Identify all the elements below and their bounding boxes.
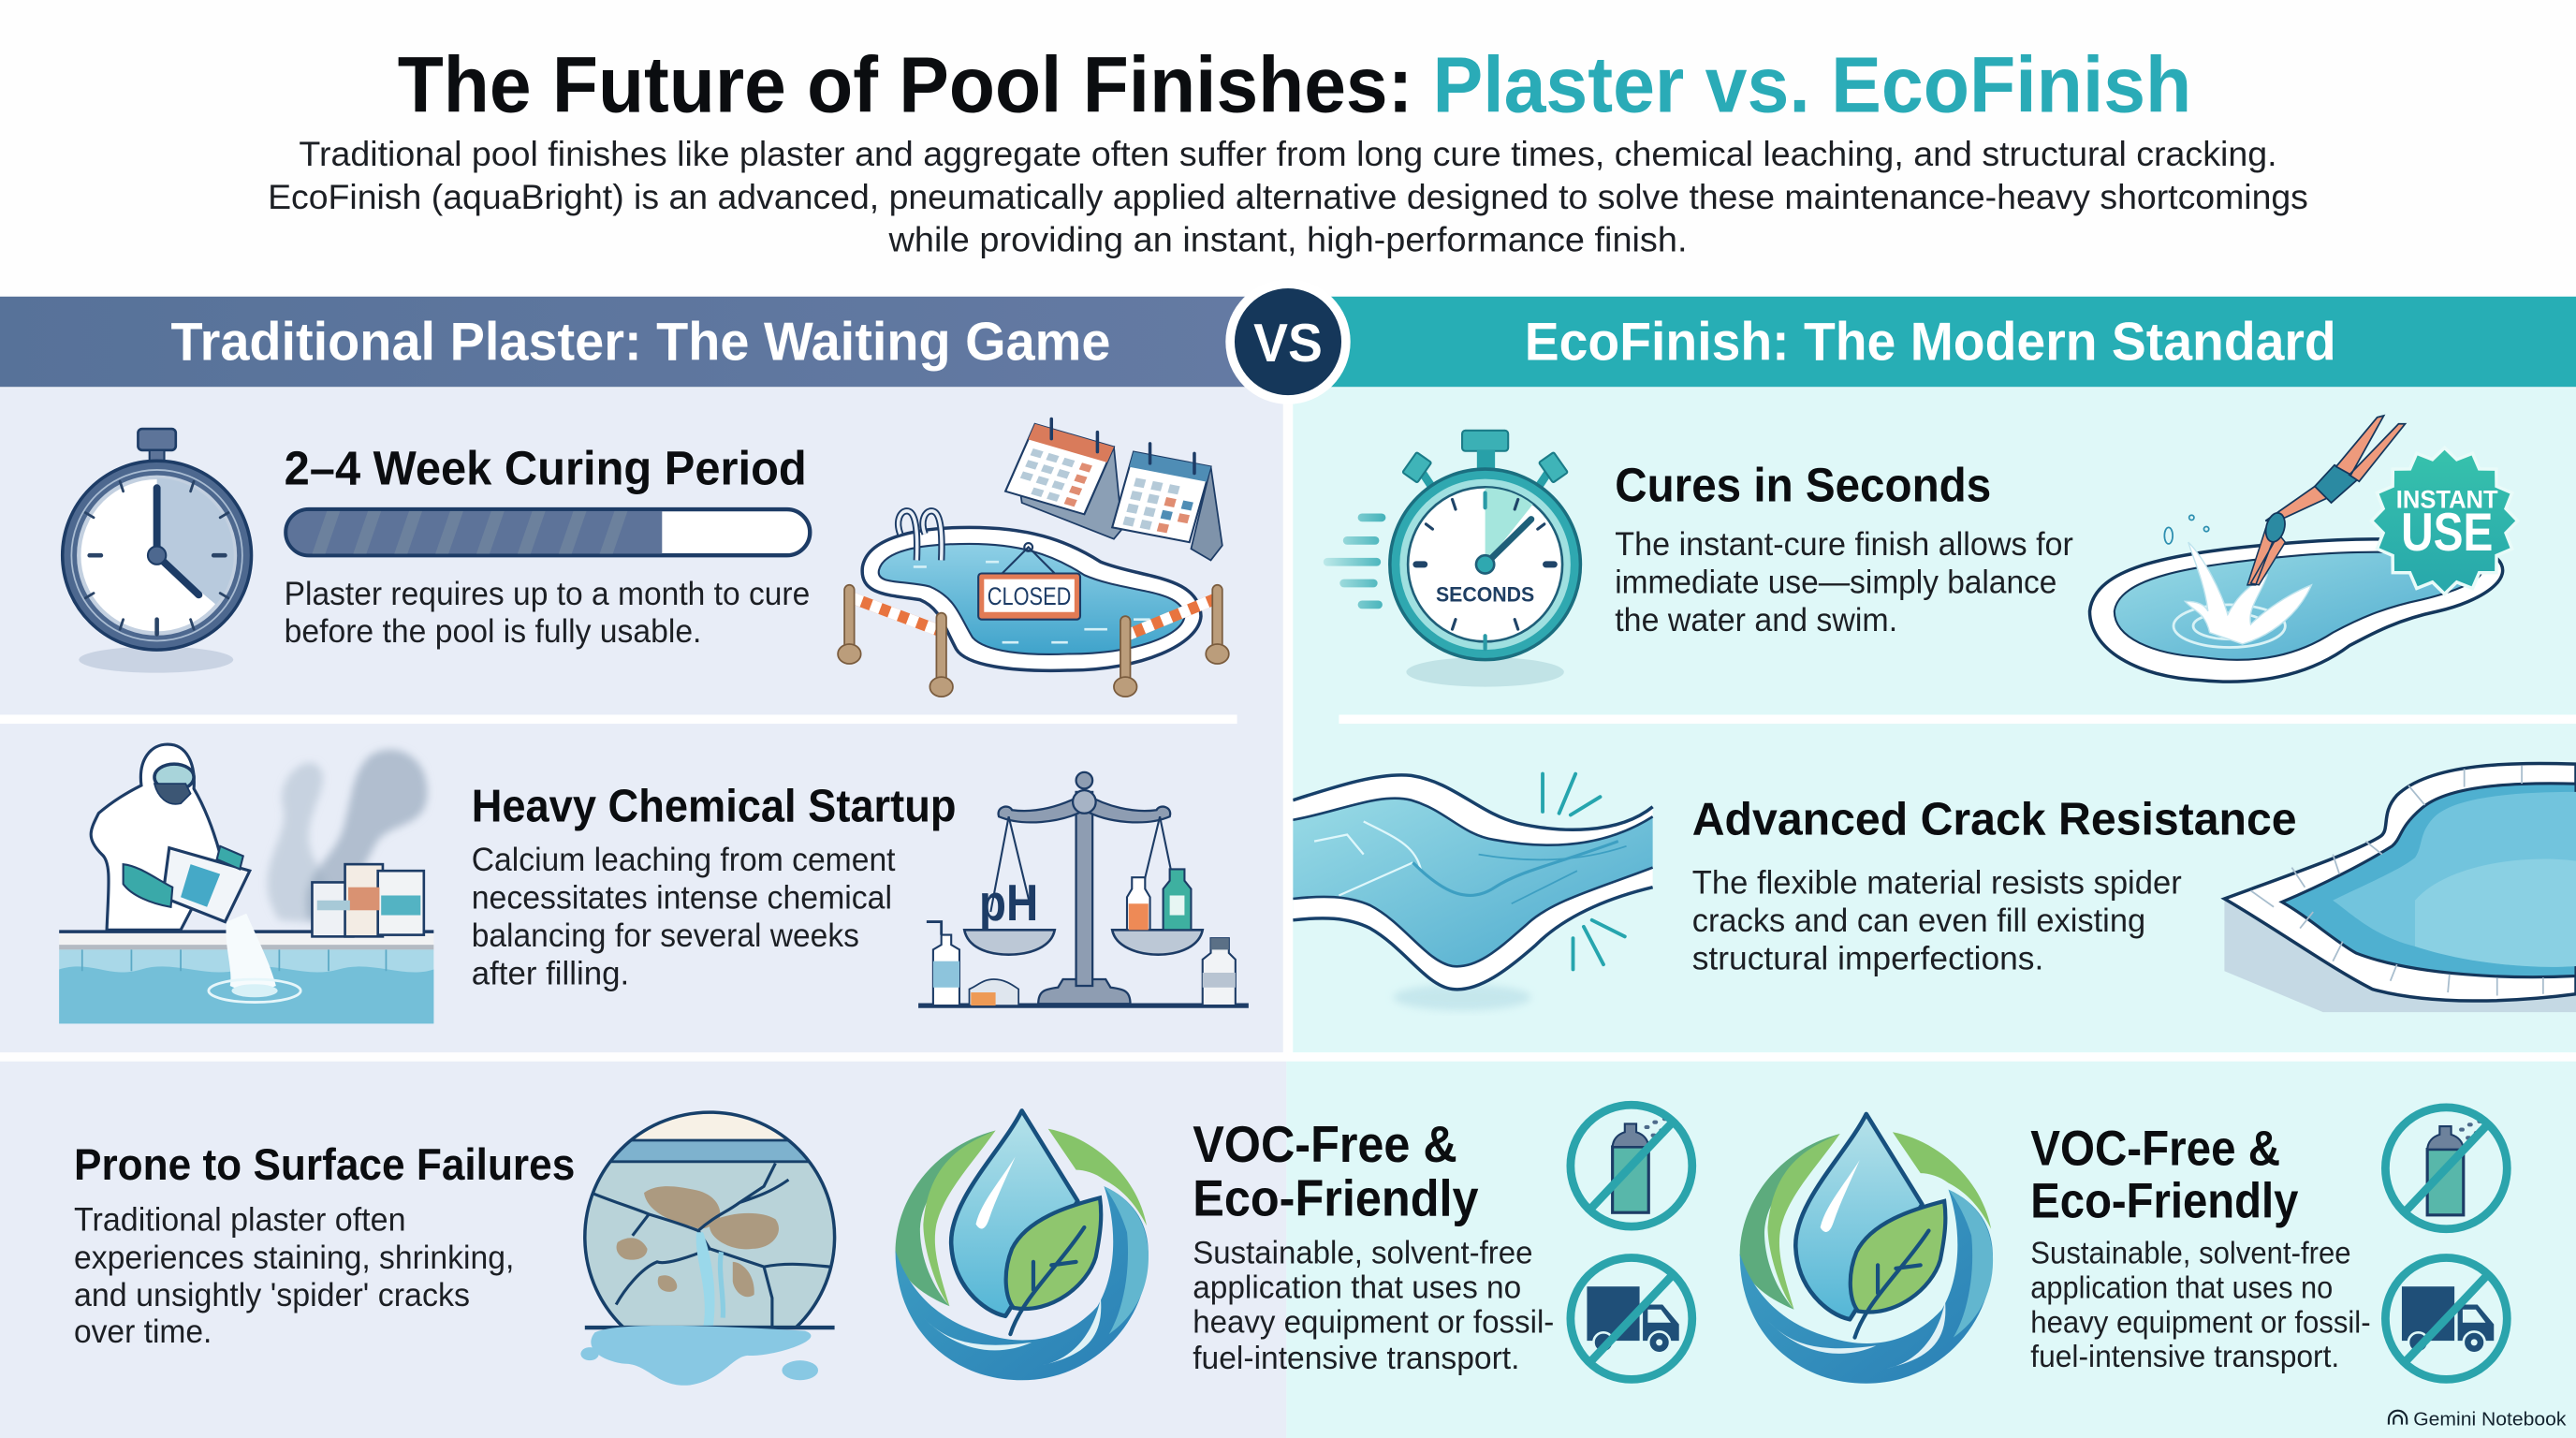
text block: surface failures: experiences staining, shrinking, (74, 1240, 514, 1276)
header: ecofinish (1327, 297, 2576, 387)
text block: voc-free right: Eco-Friendly (2030, 1173, 2298, 1228)
intro paragraph: EcoFinish (aquaBright) is an advanced, pneumatically applied alternative designed to solve these maintenance-heavy shortcomings (268, 178, 2308, 216)
text block: voc-free right: VOC-Free & (2030, 1121, 2280, 1176)
illustration: flexing finish wave (1293, 774, 1653, 1010)
text: crack description: cracks and can even fill existing (1692, 902, 2145, 939)
header: ecofinish: EcoFinish: The Modern Standard (1525, 312, 2336, 372)
title: The Future of Pool Finishes: (398, 40, 1412, 128)
text block: voc-free left: fuel-intensive transport. (1193, 1341, 1519, 1376)
heading: crack resistance: Advanced Crack Resistance (1692, 795, 2297, 845)
text block: voc-free left: VOC-Free & (1193, 1116, 1457, 1173)
panel: traditional plaster background (0, 388, 1286, 1438)
text: chemical description: necessitates intense chemical (472, 880, 892, 917)
text block: voc-free left: Sustainable, solvent-free (1193, 1236, 1533, 1271)
text: cures description: immediate use—simply balance (1615, 565, 2056, 601)
header: traditional plaster: Traditional Plaster: The Waiting Game (171, 312, 1110, 372)
intro paragraph: while providing an instant, high-performance finish. (887, 221, 1687, 259)
instant use badge: USE (2401, 503, 2493, 563)
illustration: cracked plaster (575, 1101, 846, 1386)
text block: voc-free right: Sustainable, solvent-free (2030, 1237, 2351, 1271)
text block: voc-free left: Eco-Friendly (1193, 1170, 1479, 1227)
icon: no heavy transport (1571, 1257, 1692, 1379)
text: cures description: The instant-cure finish allows for (1615, 526, 2073, 563)
text: cures description (1615, 526, 2073, 638)
illustration: swimmer diving into pool (2089, 416, 2518, 682)
icon: calendars (1005, 419, 1222, 560)
illustration: pool corner (2224, 764, 2576, 1012)
title: Plaster vs. EcoFinish (1432, 40, 2191, 128)
vs badge: VS (1253, 314, 1323, 374)
illustration: worker pouring chemicals (59, 744, 433, 1023)
icon: plaster stopwatch (63, 429, 252, 673)
intro paragraph (268, 135, 2308, 259)
vs badge (1225, 279, 1351, 404)
instant use badge (2371, 448, 2518, 594)
illustration: ph balance scale (918, 772, 1249, 1005)
intro paragraph: Traditional pool finishes like plaster and aggregate often suffer from long cure times, chemical leaching, and structural cracking. (299, 135, 2277, 173)
text: chemical description (472, 842, 896, 991)
icon: no heavy transport right (2385, 1257, 2507, 1379)
text block: surface failures: over time. (74, 1313, 212, 1350)
text: crack description: The flexible material resists spider (1692, 865, 2182, 902)
icon: water drop and leaf logo right (1740, 1114, 1993, 1384)
text: chemical description: balancing for several weeks (472, 917, 859, 954)
title (398, 40, 2191, 128)
text block: voc-free right: heavy equipment or fossil- (2030, 1305, 2371, 1340)
text: chemical description: after filling. (472, 955, 629, 991)
watermark: Gemini Notebook (2413, 1409, 2567, 1430)
icon: no solvent spray right (2385, 1108, 2507, 1229)
text block: voc-free right: application that uses no (2030, 1270, 2333, 1305)
text: curing description (285, 576, 810, 650)
instant use badge: INSTANT (2396, 484, 2498, 513)
icon: ecofinish stopwatch (1327, 431, 1580, 687)
row dividers (0, 714, 2576, 724)
heading: chemical startup: Heavy Chemical Startup (472, 782, 956, 832)
text: curing description: before the pool is fully usable. (285, 613, 701, 650)
text block: voc-free left (1193, 1116, 1554, 1376)
closed sign (978, 574, 1080, 620)
panel: ecofinish background (1286, 388, 2576, 1438)
text block: surface failures: Prone to Surface Failures (74, 1140, 575, 1190)
heading: cures in seconds: Cures in Seconds (1615, 458, 1991, 511)
icon: ecofinish stopwatch: SECONDS (1436, 582, 1534, 606)
text: chemical description: Calcium leaching from cement (472, 842, 896, 878)
header: traditional plaster (0, 297, 1249, 387)
text block: voc-free right (2030, 1121, 2371, 1374)
text: curing description: Plaster requires up to a month to cure (285, 576, 810, 612)
text: crack description: structural imperfections. (1692, 940, 2043, 976)
text block: surface failures (74, 1140, 575, 1350)
text block: surface failures: and unsightly 'spider' cracks (74, 1277, 470, 1313)
text block: voc-free left: application that uses no (1193, 1269, 1521, 1305)
icon: no solvent spray (1571, 1105, 1692, 1226)
text block: surface failures: Traditional plaster often (74, 1202, 406, 1239)
text: cures description: the water and swim. (1615, 602, 1897, 638)
progress bar (285, 509, 810, 555)
illustration: ph balance scale: pH (979, 874, 1038, 932)
heading: curing period: 2–4 Week Curing Period (285, 442, 807, 495)
text: crack description (1692, 865, 2182, 976)
illustration: closed pool (838, 511, 1229, 697)
text block: voc-free left: heavy equipment or fossil- (1193, 1304, 1554, 1340)
text block: voc-free right: fuel-intensive transport. (2030, 1340, 2339, 1374)
icon: water drop and leaf logo (896, 1110, 1149, 1380)
closed sign: CLOSED (988, 581, 1071, 610)
